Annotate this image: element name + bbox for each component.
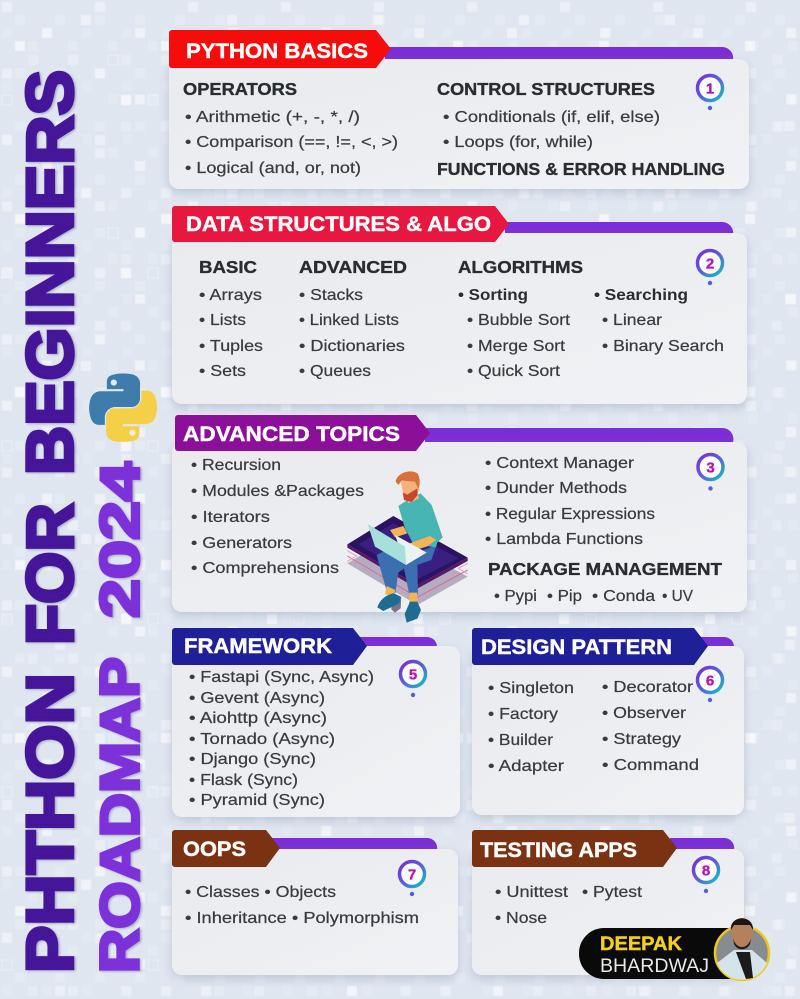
- text: advanced list left: • Iterators: [191, 509, 270, 526]
- text: advanced: [299, 257, 407, 380]
- text: package management: • Conda: [592, 588, 655, 605]
- panel 2: data structures and algo: [172, 206, 747, 404]
- text: advanced: • Queues: [299, 363, 371, 380]
- badge 7: 7: [408, 866, 416, 884]
- badge 2: [698, 250, 722, 285]
- text: patterns left: [488, 680, 574, 775]
- text: operators: [183, 79, 398, 177]
- banner: advanced topics: [175, 415, 430, 451]
- badge 1: 1: [706, 80, 714, 98]
- subtitle: Roadmap 2024: ROADMAP: [88, 657, 150, 973]
- text: operators: • Logical (and, or, not): [185, 160, 361, 177]
- text: control structures: CONTROL STRUCTURES: [437, 79, 655, 99]
- banner: framework: FRAMEWORK: [184, 635, 332, 658]
- text: operators: OPERATORS: [183, 79, 297, 99]
- panel 3: advanced topics: [172, 415, 747, 612]
- shirt: [398, 493, 443, 547]
- text: algorithms searching: • Searching: [594, 287, 688, 304]
- text: advanced: • Linked Lists: [299, 312, 399, 329]
- author badge: [579, 918, 769, 980]
- text: package management: • Pypi: [494, 588, 537, 605]
- neck and face: [401, 478, 419, 503]
- text: framework list: • Gevent (Async): [189, 690, 325, 707]
- text: algorithms sorting: [458, 257, 583, 380]
- text: algorithms sorting: • Quick Sort: [467, 363, 561, 380]
- text: control structures: [437, 79, 660, 151]
- laptop: [395, 535, 427, 565]
- text: package management: [488, 559, 722, 605]
- banner: data structures and algo: DATA STRUCTURES & ALGO: [186, 213, 491, 236]
- banner: oops: [172, 830, 280, 867]
- title: Phthon for Beginners: BEGINNERS: [12, 70, 86, 475]
- banner: design pattern: DESIGN PATTERN: [481, 636, 672, 659]
- badge 8: [694, 858, 718, 893]
- text: functions and error handling: FUNCTIONS & ERROR HANDLING: [437, 159, 725, 179]
- shoe shadow: [391, 597, 401, 613]
- banner: data structures and algo: [172, 206, 509, 242]
- text: patterns right: • Observer: [602, 705, 687, 722]
- arms: [390, 526, 436, 552]
- panel 7: oops: [172, 830, 458, 975]
- text: framework list: • Flask (Sync): [189, 772, 298, 789]
- subtitle: Roadmap 2024: 2024: [88, 461, 150, 618]
- text: algorithms searching: • Binary Search: [602, 338, 724, 355]
- text: testing list: • Pytest: [582, 884, 643, 901]
- banner: design pattern: [472, 628, 708, 665]
- text: basic: BASIC: [199, 257, 257, 277]
- title: Phthon for Beginners: [12, 70, 86, 973]
- badge 7: [400, 862, 424, 896]
- banner: testing apps: [472, 830, 677, 867]
- text: patterns right: • Strategy: [602, 731, 681, 748]
- subtitle: Roadmap 2024: [88, 461, 150, 973]
- text: framework list: [189, 669, 374, 809]
- text: basic: [199, 257, 263, 380]
- text: advanced list left: • Comprehensions: [191, 560, 339, 577]
- text: testing list: [495, 884, 643, 927]
- text: oops list: • Classes • Objects: [185, 884, 336, 901]
- beard: [403, 488, 418, 502]
- panel 1: python basics: [169, 30, 749, 189]
- text: framework list: • Django (Sync): [189, 751, 316, 768]
- text: algorithms sorting: • Sorting: [458, 287, 528, 304]
- text: advanced list right: • Context Manager: [485, 455, 635, 472]
- badge 6: [698, 668, 722, 702]
- title: Phthon for Beginners: FOR: [12, 503, 86, 645]
- icon: python logo: [89, 374, 157, 442]
- author badge: DEEPAK: [600, 933, 682, 955]
- text: algorithms sorting: ALGORITHMS: [458, 257, 583, 277]
- text: advanced: • Dictionaries: [299, 338, 405, 355]
- text: patterns left: • Singleton: [488, 680, 574, 697]
- banner: oops: OOPS: [183, 838, 246, 861]
- text: basic: • Lists: [199, 312, 246, 329]
- text: package management: PACKAGE MANAGEMENT: [488, 559, 722, 579]
- text: operators: • Arithmetic (+, -, *, /): [185, 109, 360, 126]
- text: advanced list left: • Modules &Packages: [191, 483, 364, 500]
- text: algorithms sorting: • Bubble Sort: [467, 312, 571, 329]
- badge 6: 6: [706, 672, 714, 690]
- text: testing list: • Nose: [495, 910, 547, 927]
- panel 5: framework: [172, 628, 460, 817]
- text: basic: • Arrays: [199, 287, 262, 304]
- banner: advanced topics: ADVANCED TOPICS: [183, 423, 400, 446]
- text: operators: • Comparison (==, !=, <, >): [185, 134, 398, 151]
- badge 1: [698, 76, 722, 110]
- illustration: man with laptop on platform: [347, 471, 468, 623]
- banner: framework: [172, 628, 367, 665]
- text: advanced list right: • Lambda Functions: [485, 531, 643, 548]
- author photo: [715, 918, 769, 980]
- shoes: [377, 593, 421, 623]
- text: algorithms searching: [594, 287, 724, 355]
- panel 8: testing apps: [472, 830, 744, 975]
- author badge: BHARDWAJ: [600, 955, 709, 977]
- text: patterns right: • Decorator: [602, 679, 694, 696]
- text: framework list: • Pyramid (Sync): [189, 792, 325, 809]
- badge 3: 3: [706, 460, 715, 476]
- text: patterns left: • Adapter: [488, 758, 565, 775]
- text: oops list: • Inheritance • Polymorphism: [185, 910, 419, 927]
- text: algorithms searching: • Linear: [602, 312, 663, 329]
- text: framework list: • Fastapi (Sync, Async): [189, 669, 374, 686]
- text: advanced list right: • Dunder Methods: [485, 480, 627, 497]
- text: advanced list right: • Regular Expressions: [485, 506, 655, 523]
- badge 5: 5: [409, 666, 417, 684]
- text: advanced list right: [485, 455, 655, 548]
- badge 3: [698, 454, 723, 491]
- jeans: [377, 545, 437, 595]
- banner: python basics: PYTHON BASICS: [186, 40, 368, 63]
- text: oops list: [185, 884, 419, 927]
- text: framework list: • Aiohttp (Async): [189, 710, 327, 727]
- text: advanced list left: • Generators: [191, 535, 292, 552]
- text: testing list: • Unittest: [495, 884, 569, 901]
- title: Phthon for Beginners: PHTHON: [12, 673, 86, 973]
- hair: [396, 471, 420, 489]
- text: patterns right: [602, 679, 699, 774]
- text: patterns left: • Factory: [488, 706, 558, 723]
- text: advanced list left: [191, 457, 364, 577]
- badge 2: 2: [706, 256, 714, 272]
- text: advanced list left: • Recursion: [191, 457, 281, 474]
- text: control structures: • Conditionals (if, elif, else): [443, 109, 660, 126]
- text: patterns right: • Command: [602, 757, 699, 774]
- text: patterns left: • Builder: [488, 732, 554, 749]
- badge 5: [400, 662, 426, 697]
- text: advanced: ADVANCED: [299, 257, 407, 277]
- ankles: [385, 586, 417, 604]
- text: basic: • Tuples: [199, 338, 263, 355]
- banner: testing apps: TESTING APPS: [480, 839, 637, 862]
- text: framework list: • Tornado (Async): [189, 731, 335, 748]
- text: control structures: • Loops (for, while): [443, 134, 593, 151]
- panel 6: design pattern: [472, 628, 744, 815]
- text: package management: • UV: [662, 588, 693, 605]
- text: advanced: • Stacks: [299, 287, 363, 304]
- text: basic: • Sets: [199, 363, 246, 380]
- badge 8: 8: [702, 862, 710, 880]
- text: package management: • Pip: [547, 588, 582, 605]
- text: algorithms sorting: • Merge Sort: [467, 338, 566, 355]
- banner: python basics: [169, 30, 391, 68]
